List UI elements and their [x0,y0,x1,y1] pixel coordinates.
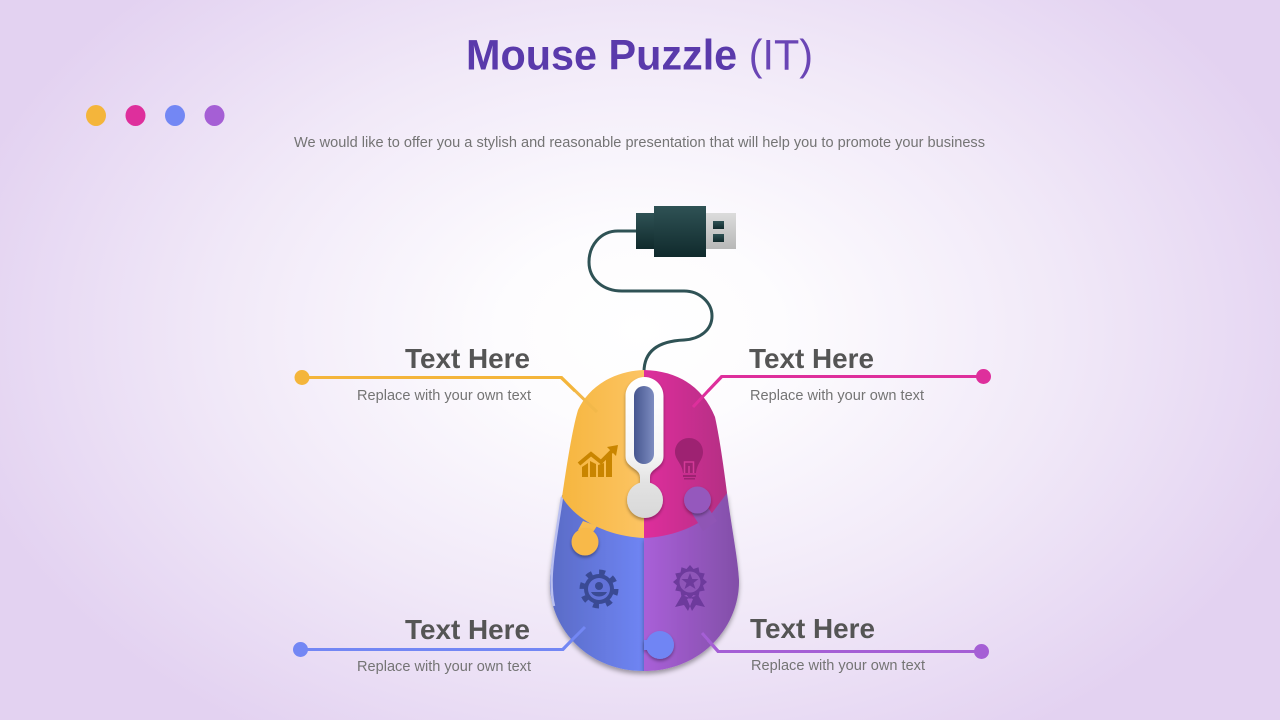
subtitle: We would like to offer you a stylish and reasonable presentation that will help you to promote your business [294,135,985,151]
callout: top left [294,343,575,404]
scroll wheel [634,386,654,464]
highlight edge [552,497,562,606]
connector line inside: purple [702,633,718,651]
connector line inside: blue [563,627,585,649]
icon: chart [579,445,618,477]
icon: light bulb [675,438,703,480]
knob: blue [644,631,674,659]
mouse body [550,370,739,671]
callout: bottom left: Replace with your own text [357,659,531,675]
USB cable [589,231,712,372]
callout: bottom left: Text Here [405,614,530,645]
title: Mouse Puzzle (IT) [466,32,813,80]
callout: bottom right [708,613,989,674]
icon: medal [673,565,707,611]
connector line inside: magenta [693,376,722,407]
icon: gear [582,572,616,606]
puzzle piece: purple [644,493,739,671]
callout: top right: Text Here [749,343,874,374]
connector line inside: yellow [561,377,597,412]
callout: top right: Replace with your own text [750,388,924,404]
callout: bottom right: Text Here [750,613,875,644]
callout: bottom left [293,614,572,675]
puzzle piece: magenta [644,370,727,538]
callout: top right [708,343,991,404]
knob: purple [684,486,717,531]
scroll wheel housing [626,377,664,518]
callout: top left: Replace with your own text [357,388,531,404]
legend dots [86,105,224,126]
callout: top left: Text Here [405,343,530,374]
knob: yellow [572,521,598,556]
callout: bottom right: Replace with your own text [751,658,925,674]
puzzle piece: yellow [562,370,644,538]
puzzle piece: blue [550,495,644,671]
USB plug [636,206,736,257]
